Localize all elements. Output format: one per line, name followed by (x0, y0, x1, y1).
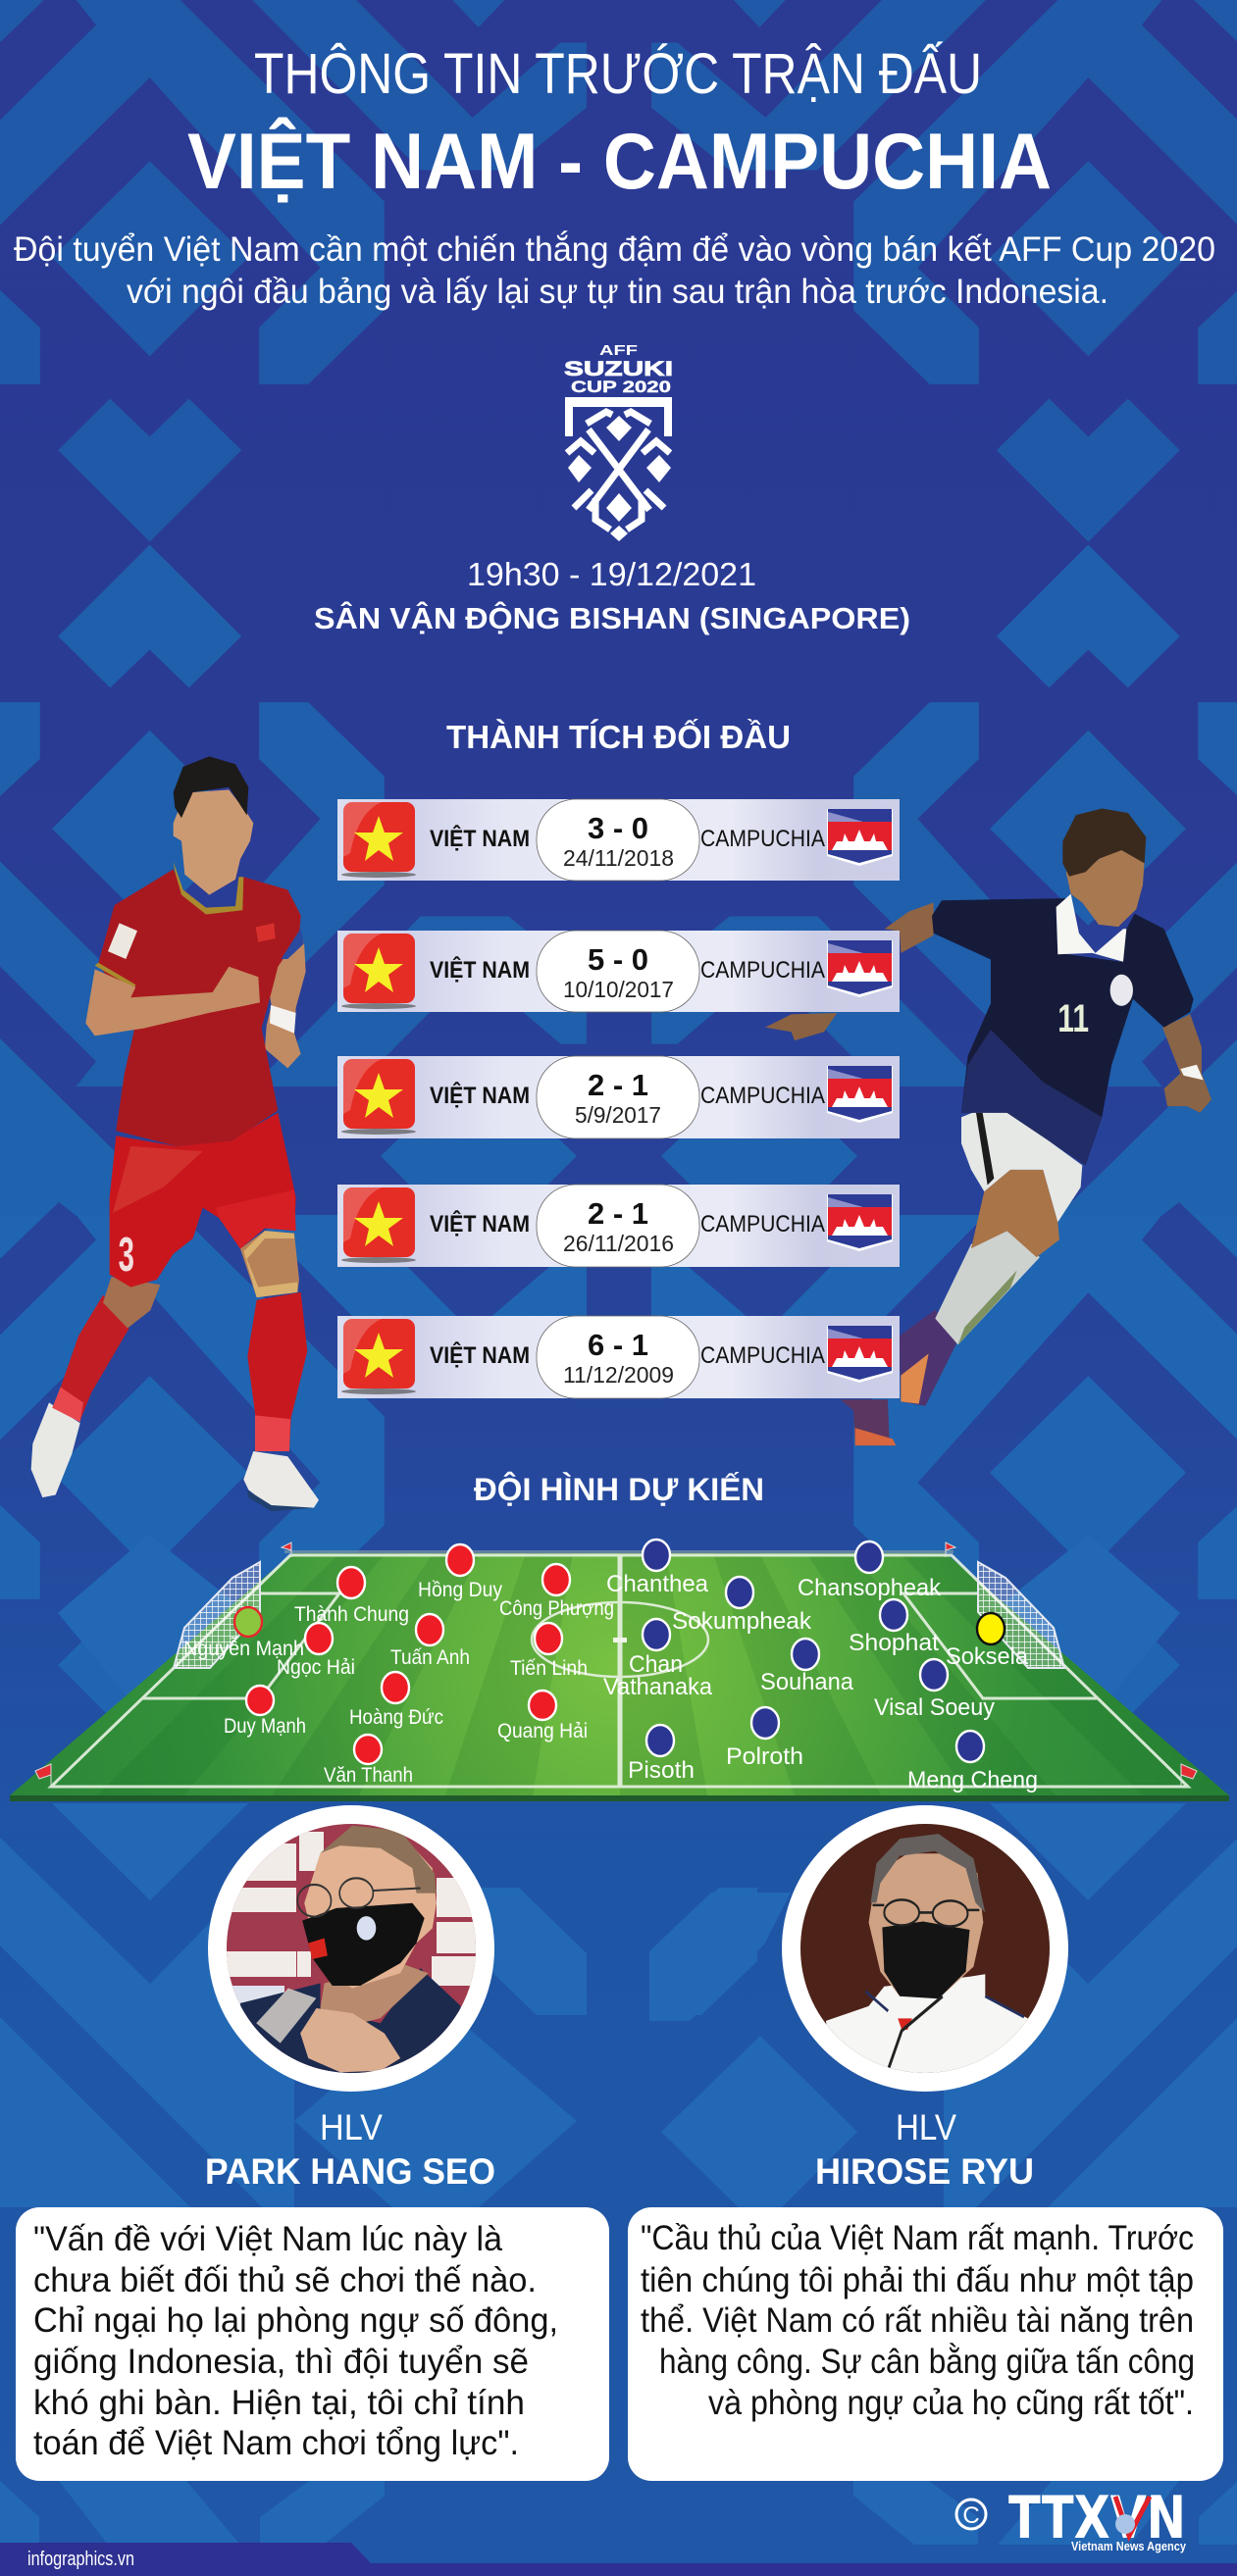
quote: Hirose Ryu (628, 2207, 1223, 2481)
quote: Park Hang Seo: Chỉ ngại họ lại phòng ngự số đông, (33, 2301, 558, 2340)
head-to-head row 2: CAMPUCHIA (700, 957, 825, 984)
Vietnam line-up: Quang Hải (497, 1720, 588, 1743)
Cambodia line-up: Chansopheak (798, 1575, 942, 1601)
head-to-head row 5 (337, 1316, 900, 1398)
Cambodia line-up: Polroth (726, 1743, 803, 1770)
Cambodia line-up: Shophat (849, 1630, 939, 1656)
icon: Cambodia flag (827, 1326, 893, 1383)
icon: Cambodia flag (827, 1194, 893, 1251)
Vietnam line-up: Thành Chung (294, 1603, 409, 1626)
quote: Hirose Ryu: và phòng ngự của họ cũng rất tốt". (708, 2384, 1194, 2422)
logo: TTXVN: Vietnam News Agency (1071, 2539, 1187, 2553)
player: Vietnam (31, 756, 319, 1511)
Cambodia line-up: Visal Soeuy (874, 1694, 995, 1721)
icon: Cambodia flag (827, 940, 893, 997)
title (187, 42, 1052, 206)
goal: left (174, 1562, 260, 1668)
player: Vietnam: 3 (119, 1229, 134, 1282)
Vietnam line-up: Nguyễn Mạnh (183, 1638, 304, 1660)
head-to-head row 1: 24/11/2018 (563, 845, 674, 871)
icon: Cambodia flag (827, 1066, 893, 1123)
coach name: Park Hang Seo (205, 2107, 495, 2192)
title: VIỆT NAM - CAMPUCHIA (187, 117, 1052, 206)
player: Cambodia (765, 809, 1211, 1445)
Cambodia line-up: Soksela (946, 1643, 1029, 1670)
icon: Vietnam flag (341, 1319, 416, 1394)
match time: 19h30 - 19/12/2021 (467, 556, 756, 592)
icon: Cambodia flag (827, 809, 893, 866)
head-to-head row 1: CAMPUCHIA (700, 826, 825, 852)
AFF Suzuki Cup logo: AFF (599, 342, 638, 359)
Cambodia line-up: Chanthea (606, 1571, 709, 1597)
coach portrait: Park Hang Seo (208, 1805, 494, 2092)
quote: Park Hang Seo: "Vấn đề với Việt Nam lúc này là (33, 2220, 503, 2258)
head-to-head row 4: CAMPUCHIA (700, 1211, 825, 1237)
quote: Park Hang Seo: toán để Việt Nam chơi tổng lực". (33, 2424, 519, 2462)
intro text: với ngôi đầu bảng và lấy lại sự tự tin sau trận hòa trước Indonesia. (127, 273, 1108, 311)
AFF Suzuki Cup logo: CUP 2020 (571, 378, 671, 396)
head-to-head row 5: VIỆT NAM (430, 1341, 530, 1369)
stadium: SÂN VẬN ĐỘNG BISHAN (SINGAPORE) (314, 600, 910, 635)
score pill (537, 799, 699, 881)
quote: Park Hang Seo: giống Indonesia, thì đội tuyển sẽ (33, 2343, 529, 2381)
icon: Vietnam flag (341, 934, 416, 1009)
heading: line-up: ĐỘI HÌNH DỰ KIẾN (474, 1472, 764, 1507)
Vietnam line-up: Duy Mạnh (224, 1715, 306, 1738)
Cambodia line-up: Pisoth (628, 1757, 695, 1784)
Vietnam line-up: Hồng Duy (418, 1579, 502, 1601)
head-to-head row 1: 3 - 0 (588, 811, 648, 845)
score pill (537, 1185, 699, 1267)
quote: Hirose Ryu: thể. Việt Nam có rất nhiều tài năng trên (641, 2301, 1194, 2340)
logo: TTXVN: C (962, 2502, 980, 2529)
head-to-head row 2 (337, 931, 900, 1012)
Cambodia line-up: Sokumpheak (672, 1608, 812, 1635)
head-to-head row 3: 5/9/2017 (575, 1102, 661, 1128)
Cambodia line-up (603, 1540, 1038, 1793)
icon: Vietnam flag (341, 802, 416, 878)
goal: right (978, 1562, 1064, 1668)
head-to-head row 3: CAMPUCHIA (700, 1083, 825, 1109)
quote: Hirose Ryu: tiên chúng tôi phải thi đấu như một tập (641, 2261, 1194, 2299)
head-to-head row 5: CAMPUCHIA (700, 1342, 825, 1369)
coach name: Hirose Ryu: HLV (896, 2107, 956, 2147)
Cambodia line-up: Meng Cheng (907, 1767, 1038, 1793)
head-to-head row 2: VIỆT NAM (430, 956, 530, 984)
head-to-head row 1 (337, 799, 900, 881)
score pill (537, 1316, 699, 1398)
head-to-head row 2: 10/10/2017 (563, 977, 674, 1002)
quote: Park Hang Seo: khó ghi bàn. Hiện tại, tôi chỉ tính (33, 2384, 525, 2422)
logo: TTXVN (956, 2484, 1187, 2553)
head-to-head row 2: 5 - 0 (588, 942, 648, 977)
footer bar: infographics.vn (27, 2549, 134, 2570)
AFF Suzuki Cup logo (564, 342, 673, 541)
heading: head-to-head: THÀNH TÍCH ĐỐI ĐẦU (446, 718, 791, 755)
icon: Vietnam flag (341, 1187, 416, 1263)
coach name: Park Hang Seo: PARK HANG SEO (205, 2151, 495, 2192)
football pitch (10, 1542, 1229, 1801)
player: Cambodia: 11 (1057, 996, 1089, 1040)
Cambodia line-up: Chan (629, 1651, 683, 1678)
head-to-head row 5: 6 - 1 (588, 1328, 648, 1362)
Vietnam line-up (183, 1544, 614, 1787)
icon: Vietnam flag (341, 1059, 416, 1135)
score pill (537, 1056, 699, 1138)
score pill (537, 931, 699, 1012)
head-to-head row 4 (337, 1185, 900, 1267)
coach name: Hirose Ryu: HIROSE RYU (815, 2151, 1034, 2192)
Vietnam line-up: Tuấn Anh (390, 1646, 470, 1669)
title: THÔNG TIN TRƯỚC TRẬN ĐẤU (254, 42, 982, 106)
Vietnam line-up: Ngọc Hải (277, 1656, 355, 1679)
head-to-head row 4: 2 - 1 (588, 1196, 648, 1231)
Vietnam line-up: Hoàng Đức (349, 1706, 443, 1729)
intro text (14, 230, 1215, 311)
coach portrait: Hirose Ryu (782, 1805, 1068, 2092)
Cambodia line-up: Vathanaka (603, 1674, 713, 1700)
quote: Hirose Ryu: "Cầu thủ của Việt Nam rất mạnh. Trước (641, 2219, 1194, 2257)
AFF Suzuki Cup logo: SUZUKI (564, 358, 673, 380)
coach name: Hirose Ryu (815, 2107, 1034, 2192)
head-to-head row 4: VIỆT NAM (430, 1210, 530, 1237)
coach name: Park Hang Seo: HLV (320, 2107, 383, 2147)
intro text: Đội tuyển Việt Nam cần một chiến thắng đậm để vào vòng bán kết AFF Cup 2020 (14, 230, 1215, 269)
Vietnam line-up: Văn Thanh (324, 1764, 413, 1787)
Cambodia line-up: Souhana (760, 1669, 854, 1695)
corner flags (35, 1542, 1197, 1787)
logo: TTXVN: TTXVN (1008, 2484, 1186, 2552)
head-to-head row 4: 26/11/2016 (563, 1231, 674, 1256)
head-to-head row 3 (337, 1056, 900, 1138)
head-to-head row 3: VIỆT NAM (430, 1082, 530, 1109)
head-to-head row 1: VIỆT NAM (430, 825, 530, 852)
head-to-head row 3: 2 - 1 (588, 1068, 648, 1102)
head-to-head row 5: 11/12/2009 (563, 1362, 674, 1388)
quote: Park Hang Seo (16, 2207, 609, 2481)
Vietnam line-up: Tiến Linh (510, 1657, 588, 1680)
footer bar (0, 2543, 1237, 2576)
quote: Park Hang Seo: chưa biết đối thủ sẽ chơi thế nào. (33, 2261, 537, 2299)
Vietnam line-up: Công Phượng (499, 1597, 614, 1620)
